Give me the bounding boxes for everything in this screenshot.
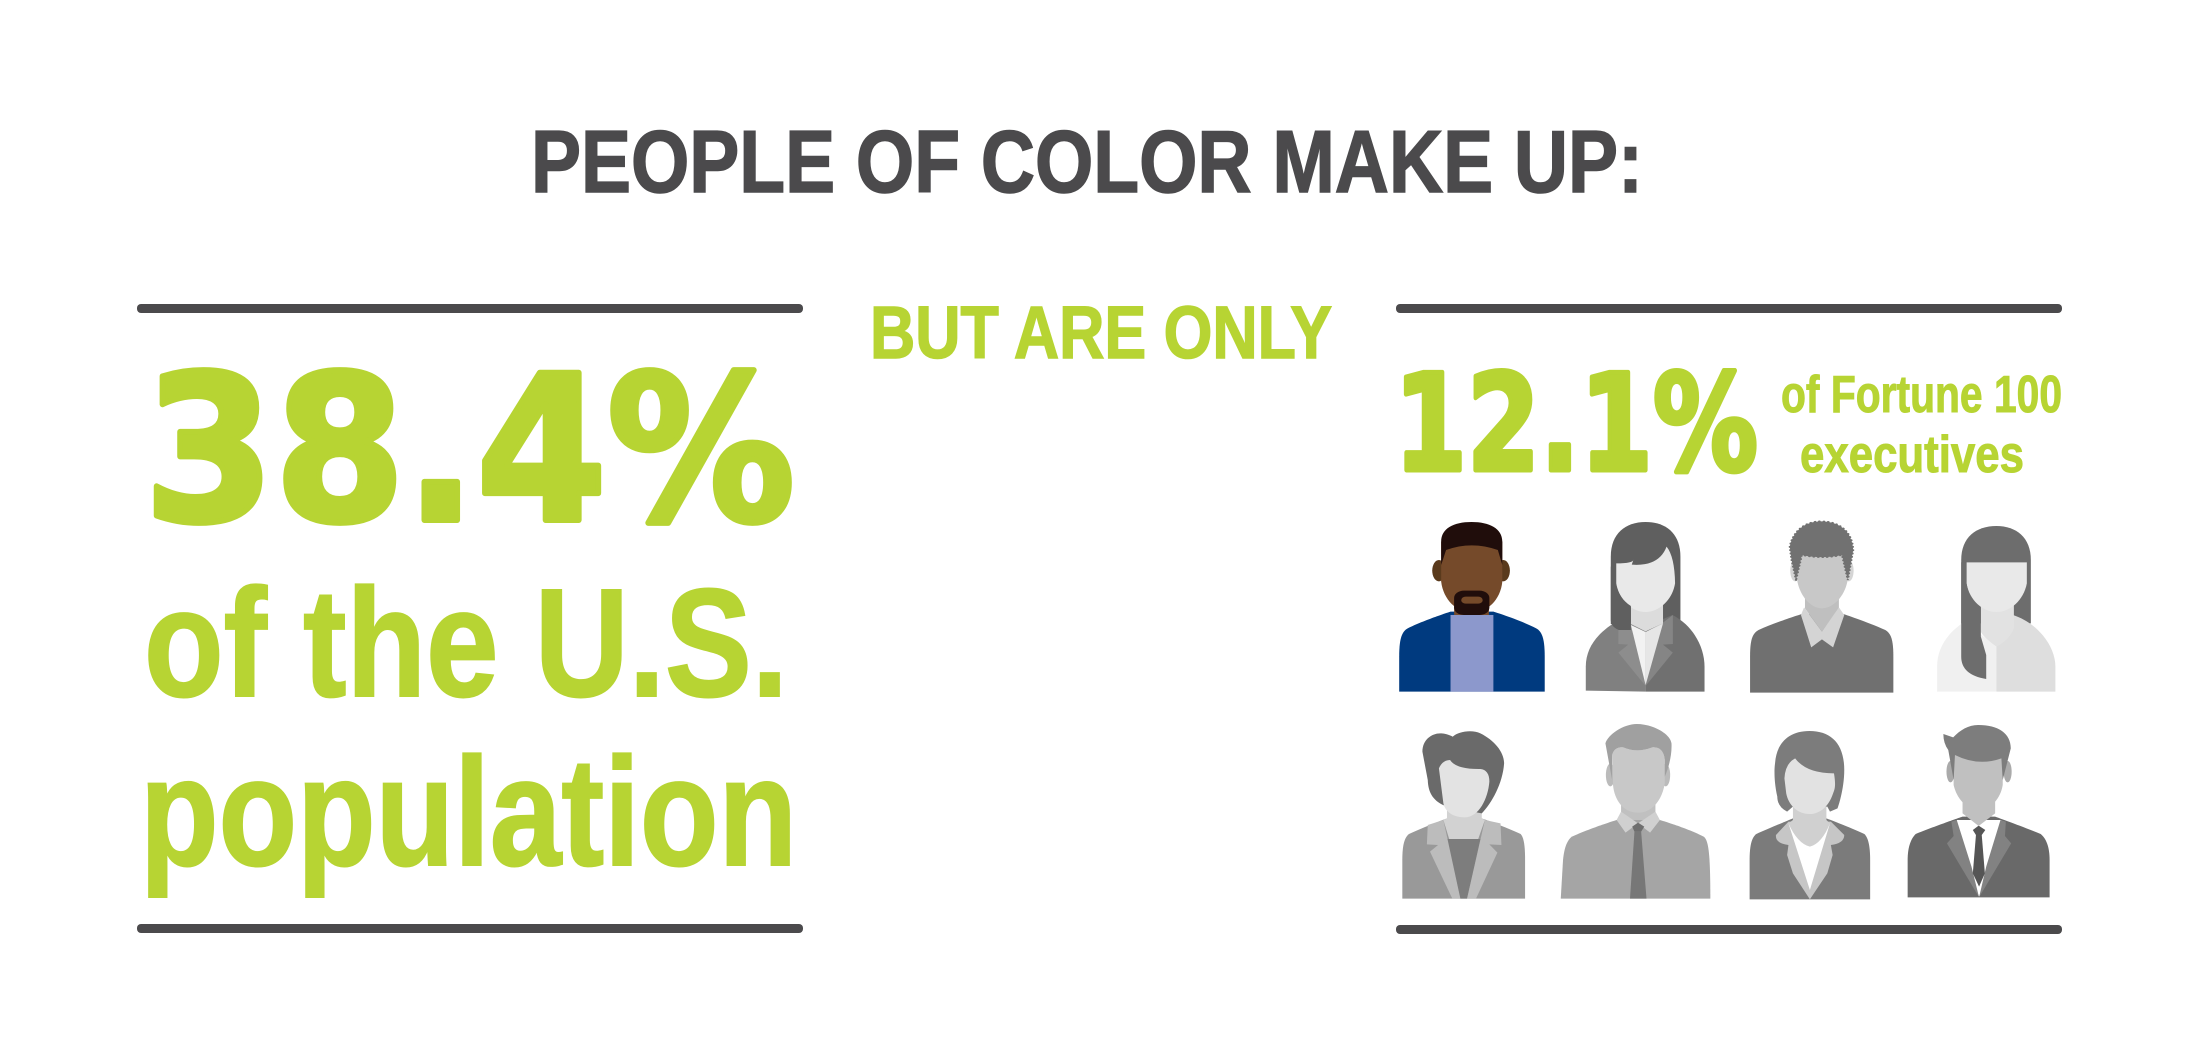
icon: woman with long hair and blazer [1586,522,1705,692]
icon: man of color in blue jacket [1399,522,1545,692]
icon: man in shirt and tie [1561,724,1710,899]
big number 12.1%: 12.1% [1394,346,1758,502]
icon: man in dark suit and tie [1908,725,2050,897]
icon: woman with bangs and light jacket [1937,526,2055,692]
text: of the U.S.: of the U.S. [144,557,788,729]
title: PEOPLE OF COLOR MAKE UP: [531,112,1643,211]
middle text: but are only: BUT ARE ONLY [870,291,1332,374]
icon: man with curly hair and sweater [1750,521,1893,693]
text: of Fortune 100: of Fortune 100 [1781,366,2062,424]
icon: woman with bob hair and dark blazer [1750,731,1870,899]
text: executives: executives [1800,426,2024,484]
right panel: executives statistic [1394,304,2062,934]
left panel: population statistic [137,304,803,933]
icon: woman with swept hair and grey blazer [1402,731,1525,899]
big number 38.4%: 38.4% [144,332,795,568]
text: population: population [140,726,797,898]
